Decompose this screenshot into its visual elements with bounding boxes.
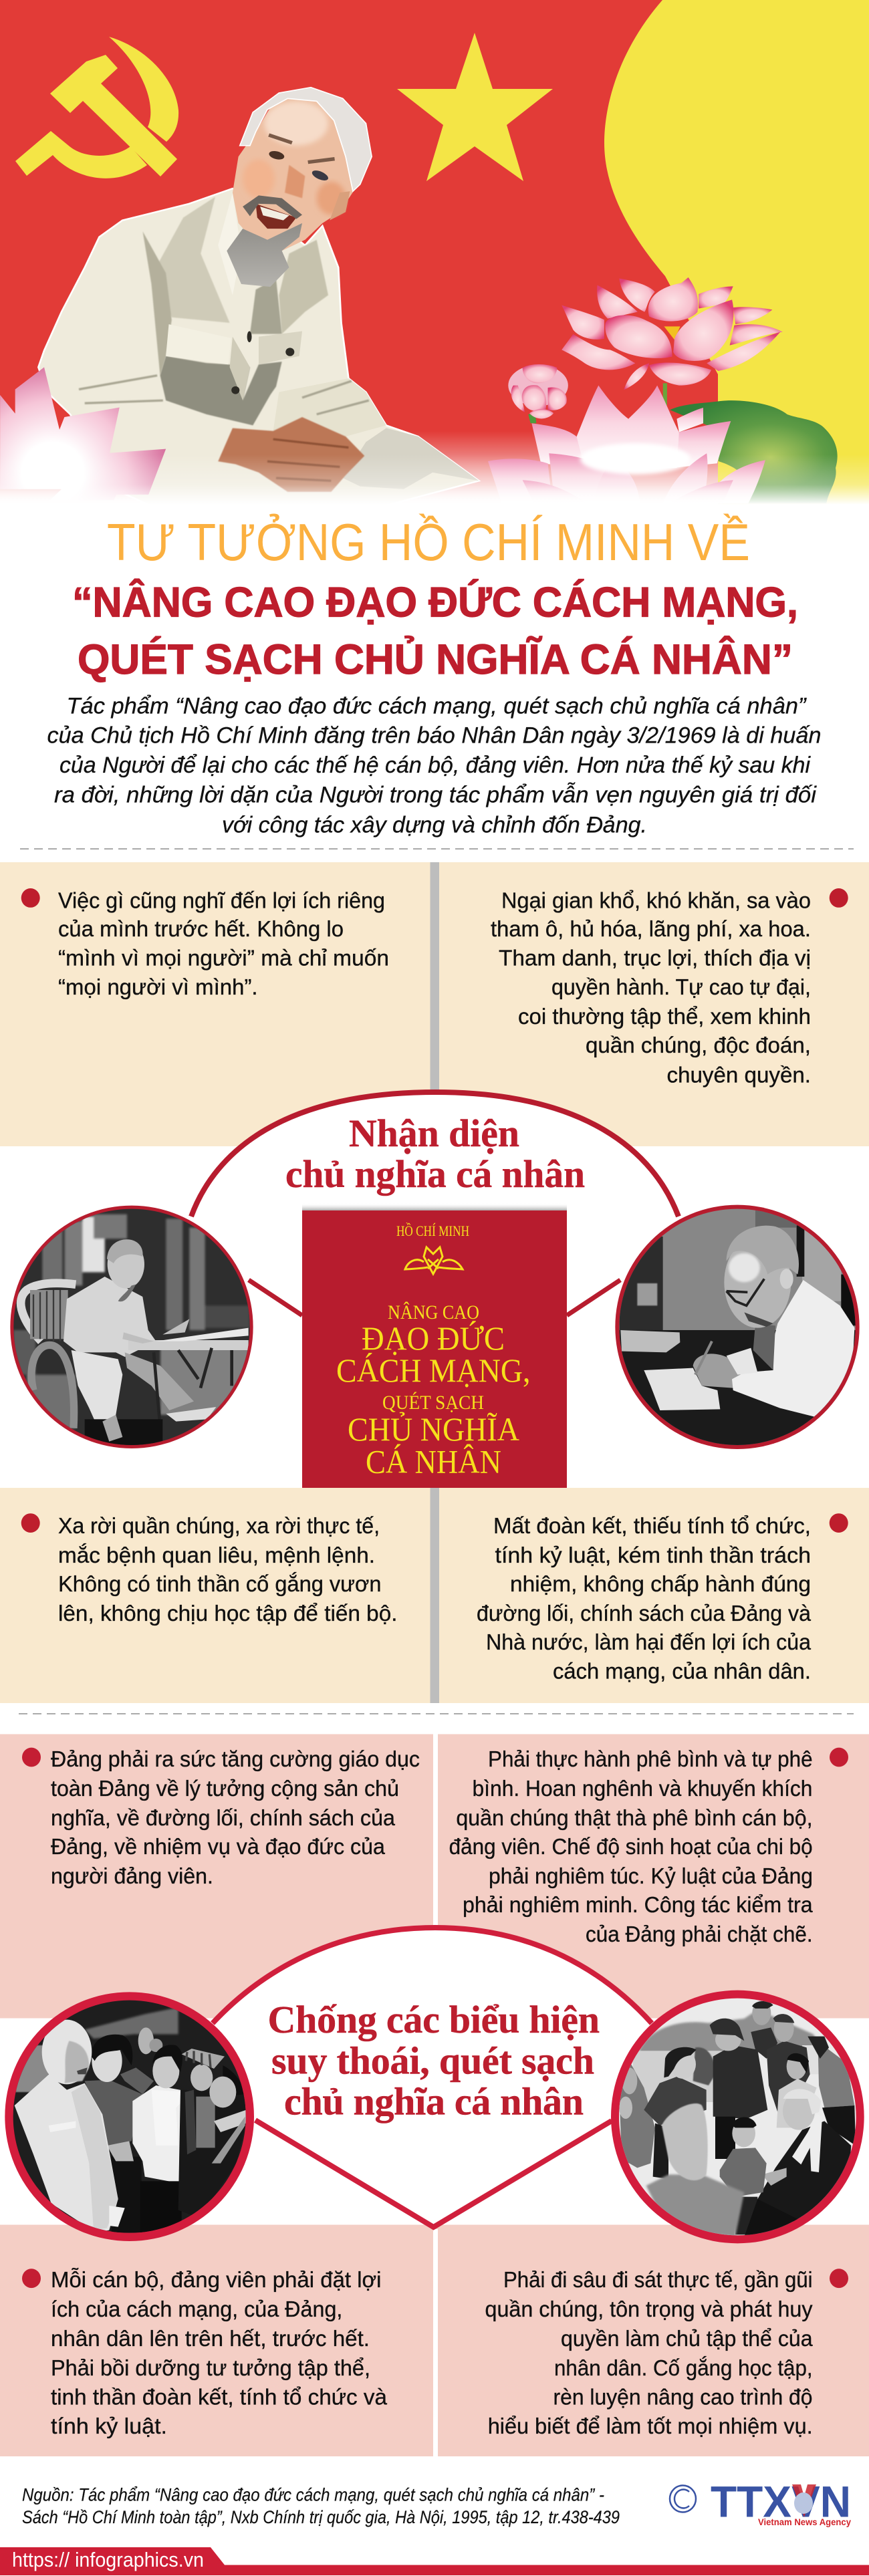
text block: closeness to masses: rèn luyện nâng cao trình độ (553, 2385, 813, 2410)
icon: lotus ornament (405, 1247, 463, 1274)
text block: disunity: tính kỷ luật, kém tinh thần trách (495, 1543, 811, 1568)
text block: collective interest: tinh thần đoàn kết, tính tổ chức và (51, 2385, 387, 2410)
icon: open lotus flower (562, 277, 783, 390)
title line 3: QUÉT SẠCH CHỦ NGHĨA CÁ NHÂN” (78, 636, 793, 683)
icon: lotus stems (663, 383, 667, 406)
text block: corruption: tham ô, hủ hóa, lãng phí, xa hoa. (491, 917, 811, 942)
book title: CÁCH MẠNG, (336, 1351, 531, 1389)
book cover (302, 1203, 567, 1488)
text block: criticism (449, 1747, 813, 1947)
text block: criticism: phải nghiêm túc. Kỷ luật của Đảng (489, 1864, 813, 1889)
title line 1: TƯ TƯỞNG HỒ CHÍ MINH VỀ (107, 513, 750, 571)
text block: disunity: cách mạng, của nhân dân. (553, 1660, 811, 1684)
logo: TTXVN: TTXVN (711, 2477, 851, 2527)
hand (218, 417, 364, 492)
text block: criticism: bình. Hoan nghênh và khuyến khích (472, 1777, 813, 1801)
intro paragraph: ra đời, những lời dặn của Người trong tác phẩm vẫn vẹn nguyên giá trị đối (54, 782, 817, 808)
text block: closeness to masses: hiểu biết để làm tốt mọi nhiệm vụ. (488, 2414, 813, 2439)
face (233, 96, 357, 251)
text block: education: toàn Đảng về lý tưởng cộng sản chủ (51, 1777, 399, 1801)
text block: education (51, 1747, 420, 1889)
book author: HỒ CHÍ MINH (396, 1222, 469, 1239)
intro paragraph: của Người để lại cho các thế hệ cán bộ, đảng viên. Hơn nửa thế kỷ sau khi (59, 753, 811, 778)
title block (72, 513, 798, 683)
text block: education: người đảng viên. (51, 1864, 213, 1889)
hair (240, 88, 372, 191)
text block: collective interest (51, 2267, 387, 2439)
intro paragraph (47, 693, 821, 838)
portrait of Ho Chi Minh (38, 88, 479, 509)
book title: NÂNG CAO (388, 1301, 479, 1323)
text block: criticism: quần chúng thật thà phê bình cán bộ, (456, 1806, 813, 1831)
icon: lotus bud (508, 364, 568, 418)
lotus flowers and leaf (488, 277, 838, 503)
footer bar (0, 2547, 869, 2575)
book title: ĐẠO ĐỨC (362, 1319, 505, 1357)
text block: collective interest: tính kỷ luật. (51, 2414, 167, 2439)
book title: CÁ NHÂN (366, 1443, 501, 1480)
icon: lower pale lotus (488, 386, 765, 503)
source note: Nguồn: Tác phẩm “Nâng cao đạo đức cách mạng, quét sạch chủ nghĩa cá nhân” - (22, 2484, 604, 2504)
icon: lotus leaf (670, 400, 838, 503)
intro paragraph: của Chủ tịch Hồ Chí Minh đăng trên báo Nhân Dân ngày 3/2/1969 là di huấn (47, 723, 821, 748)
text block: corruption: quyền hành. Tự cao tự đại, (551, 975, 811, 1000)
text block: closeness to masses: quyền làm chủ tập thể của (561, 2327, 813, 2351)
text block: corruption (491, 889, 811, 1088)
bullet: left (22, 1748, 41, 1767)
photo: greeting ethnic women (5, 1992, 254, 2241)
text block: corruption: coi thường tập thể, xem khinh (518, 1005, 811, 1029)
text block: bureaucracy: lên, không chịu học tập để tiến bộ. (58, 1601, 397, 1626)
heading: Chống các biểu hiện: chủ nghĩa cá nhân (284, 2079, 584, 2123)
paper (343, 428, 479, 489)
bullet: right (830, 888, 848, 908)
heading: Chống các biểu hiện (267, 1998, 600, 2123)
text block: education: nghĩa, về đường lối, chính sách của (51, 1806, 395, 1831)
book title: CHỦ NGHĨA (348, 1410, 519, 1448)
text block: education: Đảng, về nhiệm vụ và đạo đức của (51, 1835, 385, 1859)
panel: lower cream cards (0, 1488, 869, 1703)
footer bar: https:// infographics.vn (12, 2548, 204, 2571)
text block: self interest: của mình trước hết. Không lo (58, 917, 344, 942)
text block: education: Đảng phải ra sức tăng cường giáo dục (51, 1747, 420, 1772)
text block: collective interest: Mỗi cán bộ, đảng viên phải đặt lợi (51, 2267, 381, 2293)
bullet: left (21, 888, 40, 908)
eyes (268, 150, 285, 161)
yellow flag area (604, 0, 869, 515)
heading: Nhận diện: chủ nghĩa cá nhân (285, 1152, 585, 1196)
text block: disunity: Mất đoàn kết, thiếu tính tổ chức, (493, 1514, 811, 1539)
title line 2: “NÂNG CAO ĐẠO ĐỨC CÁCH MẠNG, (72, 579, 798, 626)
icon: copyright (670, 2485, 696, 2512)
text block: self interest: “mình vì mọi người” mà chỉ muốn (58, 946, 389, 971)
text block: criticism: của Đảng phải chặt chẽ. (586, 1922, 813, 1947)
text block: closeness to masses (485, 2268, 813, 2439)
bullet: left (21, 1513, 40, 1533)
heading: Nhận diện (285, 1112, 585, 1196)
text block: closeness to masses: nhân dân. Cố gắng học tập, (554, 2355, 813, 2381)
dome frame: section one (191, 1092, 678, 1315)
text block: bureaucracy: mắc bệnh quan liêu, mệnh lệnh. (58, 1543, 375, 1568)
book title (336, 1301, 531, 1480)
text block: bureaucracy: Không có tinh thần cố gắng vươn (58, 1571, 381, 1597)
text block: corruption: Tham danh, trục lợi, thích địa vị (499, 946, 811, 971)
icon: left lotus (0, 367, 166, 500)
source note: Sách “Hồ Chí Minh toàn tập”, Nxb Chính trị quốc gia, Hà Nội, 1995, tập 12, tr.438-439 (22, 2507, 620, 2527)
panel: top pink cards (0, 1734, 869, 2019)
shirt (38, 188, 479, 509)
text block: disunity (477, 1514, 811, 1684)
text block: bureaucracy (58, 1514, 397, 1626)
red area fade (0, 431, 718, 505)
text block: closeness to masses: Phải đi sâu đi sát thực tế, gần gũi (503, 2268, 813, 2293)
icon: hammer and sickle (15, 37, 178, 178)
white fade at base of hero (0, 455, 869, 505)
bullet: right (830, 1748, 848, 1767)
text block: criticism: đảng viên. Chế độ sinh hoạt của chi bộ (449, 1835, 813, 1859)
book title: QUÉT SẠCH (382, 1392, 484, 1414)
heading: Chống các biểu hiện: suy thoái, quét sạch (271, 2039, 594, 2083)
hero banner (0, 0, 869, 518)
intro paragraph: với công tác xây dựng và chỉnh đốn Đảng. (222, 812, 647, 838)
text block: self interest: “mọi người vì mình”. (58, 975, 258, 1000)
text block: self interest: Việc gì cũng nghĩ đến lợi ích riêng (58, 889, 385, 913)
text block: closeness to masses: quần chúng, tôn trọng và phát huy (485, 2297, 813, 2322)
panel: bottom pink cards (0, 2224, 869, 2456)
photo: writing in wicker chair (10, 1206, 253, 1448)
text block: corruption: chuyên quyền. (667, 1063, 811, 1088)
text block: corruption: quần chúng, độc đoán, (586, 1033, 811, 1058)
text block: disunity: đường lối, chính sách của Đảng và (477, 1601, 811, 1626)
text block: corruption: Ngại gian khổ, khó khăn, sa vào (501, 889, 811, 913)
text block: criticism: Phải thực hành phê bình và tự phê (488, 1747, 813, 1772)
logo: TTXVN: Vietnam News Agency (758, 2517, 851, 2527)
heading: Chống các biểu hiện: Chống các biểu hiện (267, 1998, 600, 2041)
text block: self interest (58, 889, 389, 1000)
diamond frame: section two (213, 1928, 652, 2227)
mouth and beard (227, 223, 302, 287)
text block: collective interest: ích của cách mạng, của Đảng, (51, 2297, 342, 2322)
bullet: left (22, 2269, 41, 2288)
text block: disunity: nhiệm, không chấp hành đúng (510, 1572, 811, 1597)
photo: harvest with villagers (611, 1990, 864, 2243)
intro paragraph: Tác phẩm “Nâng cao đạo đức cách mạng, quét sạch chủ nghĩa cá nhân” (67, 693, 807, 719)
text block: collective interest: Phải bồi dưỡng tư tưởng tập thể, (51, 2356, 370, 2381)
text block: bureaucracy: Xa rời quần chúng, xa rời thực tế, (58, 1514, 380, 1539)
photo: writing at desk (615, 1204, 860, 1449)
bullet: right (830, 1513, 848, 1533)
heading: Nhận diện: Nhận diện (349, 1112, 519, 1155)
text block: criticism: phải nghiêm minh. Công tác kiểm tra (463, 1893, 813, 1918)
bullet: right (830, 2269, 848, 2288)
text block: disunity: Nhà nước, làm hại đến lợi ích của (486, 1630, 811, 1655)
text block: collective interest: nhân dân lên trên hết, trước hết. (51, 2327, 370, 2351)
panel: top cream cards (0, 862, 869, 1146)
source note (22, 2484, 620, 2527)
icon: gold star (397, 33, 553, 181)
